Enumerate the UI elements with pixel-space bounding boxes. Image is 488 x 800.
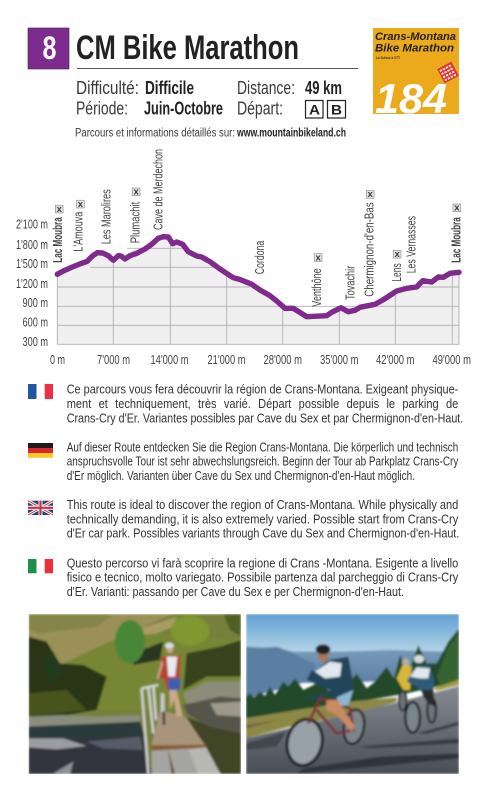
route facts: Départ:: [237, 98, 283, 118]
waypoint labels: Cordona: [253, 241, 267, 274]
route facts: Période:: [76, 98, 128, 118]
waypoint labels: Plumachit: [128, 201, 142, 243]
route facts: [76, 78, 346, 118]
waypoint labels: Venthône: [310, 268, 324, 307]
X markers beside waypoints: x: [368, 189, 374, 200]
icon: French flag: [28, 384, 53, 399]
logo: Crans-Montana Bike Marathon 184: La Suisse à VTT: [376, 56, 401, 60]
y-axis labels: 600 m: [22, 316, 48, 330]
X markers beside waypoints: x: [316, 252, 322, 263]
text block: Italian: d'Er. Varianti: passando per Cave du Sex e per Chermignon-d'en-Haut.: [67, 584, 404, 599]
icon: Italian flag: [28, 559, 53, 573]
X markers beside waypoints: x: [394, 249, 400, 260]
text block: German: [67, 440, 459, 483]
waypoint labels: Lac Moubra: [51, 217, 65, 263]
y-axis labels: 300 m: [22, 335, 48, 349]
route facts: Difficulté:: [76, 78, 139, 98]
icon: red signal flag: [437, 62, 459, 83]
waypoint labels: Les Marolires: [99, 189, 113, 244]
logo: Crans-Montana Bike Marathon 184: [373, 28, 459, 122]
chart area fill: [57, 237, 459, 344]
x-axis labels: 49'000 m: [432, 353, 471, 367]
route facts: 49 km: [305, 78, 342, 98]
photo: rider crossing footbridge: [29, 614, 241, 774]
icon: German flag: [28, 443, 53, 458]
waypoint labels: Lac Moubra: [450, 217, 464, 263]
logo: Crans-Montana Bike Marathon 184: 184: [375, 75, 447, 122]
photo: three cyclists on alpine road: [246, 614, 459, 774]
waypoint labels: Les Vernasses: [405, 216, 419, 273]
route number badge: 8: [42, 30, 56, 66]
waypoint labels: Tovachir: [343, 266, 357, 300]
X markers beside waypoints: x: [57, 204, 63, 215]
route facts: B: [331, 102, 342, 118]
text block: English: [67, 497, 459, 541]
X markers beside waypoints: x: [454, 203, 460, 214]
route facts: Difficile: [145, 78, 194, 98]
route facts: Distance:: [237, 78, 295, 98]
route number badge: [28, 28, 69, 69]
waypoint labels: L'Amouva: [72, 212, 86, 252]
x-axis labels: 21'000 m: [208, 353, 246, 367]
y-axis labels: 1'200 m: [16, 277, 48, 291]
route facts: A: [309, 102, 320, 118]
icon: UK flag: [28, 501, 53, 515]
website line: www.mountainbikeland.ch: [236, 128, 346, 140]
logo: Crans-Montana Bike Marathon 184: Crans-Montana: [375, 31, 456, 43]
x-axis labels: 7'000 m: [97, 353, 130, 367]
y-axis labels: [16, 218, 48, 349]
title: CM Bike Marathon: [76, 29, 299, 67]
y-axis labels: 900 m: [22, 296, 48, 310]
text block: Italian: [67, 555, 459, 599]
y-axis labels: 1'800 m: [16, 238, 48, 252]
x-axis labels: 28'000 m: [264, 353, 302, 367]
waypoint labels: [51, 149, 464, 307]
x-axis labels: 42'000 m: [376, 353, 414, 367]
x-axis labels: 0 m: [50, 353, 65, 367]
text block: French: [67, 382, 463, 425]
waypoint labels: Cave de Merdechon: [152, 149, 166, 230]
x-axis labels: 35'000 m: [320, 353, 358, 367]
X markers beside waypoints: [55, 187, 461, 263]
elevation line: [57, 237, 459, 317]
title rule: [77, 68, 358, 70]
elevation profile chart: [16, 149, 471, 367]
route facts: Juin-Octobre: [144, 98, 223, 118]
y-axis labels: 2'100 m: [16, 218, 48, 232]
waypoint labels: Lens: [390, 263, 404, 282]
x-axis labels: [50, 353, 471, 367]
X markers beside waypoints: x: [78, 199, 84, 210]
chart grid: [57, 240, 459, 344]
waypoint labels: Chermignon-d'en-Bas: [362, 202, 376, 297]
logo: Crans-Montana Bike Marathon 184: Bike Marathon: [375, 42, 454, 54]
x-axis labels: 14'000 m: [150, 353, 188, 367]
y-axis labels: 1'500 m: [16, 257, 48, 271]
website line: Parcours et informations détaillés sur:: [75, 128, 235, 140]
X markers beside waypoints: x: [134, 187, 140, 198]
